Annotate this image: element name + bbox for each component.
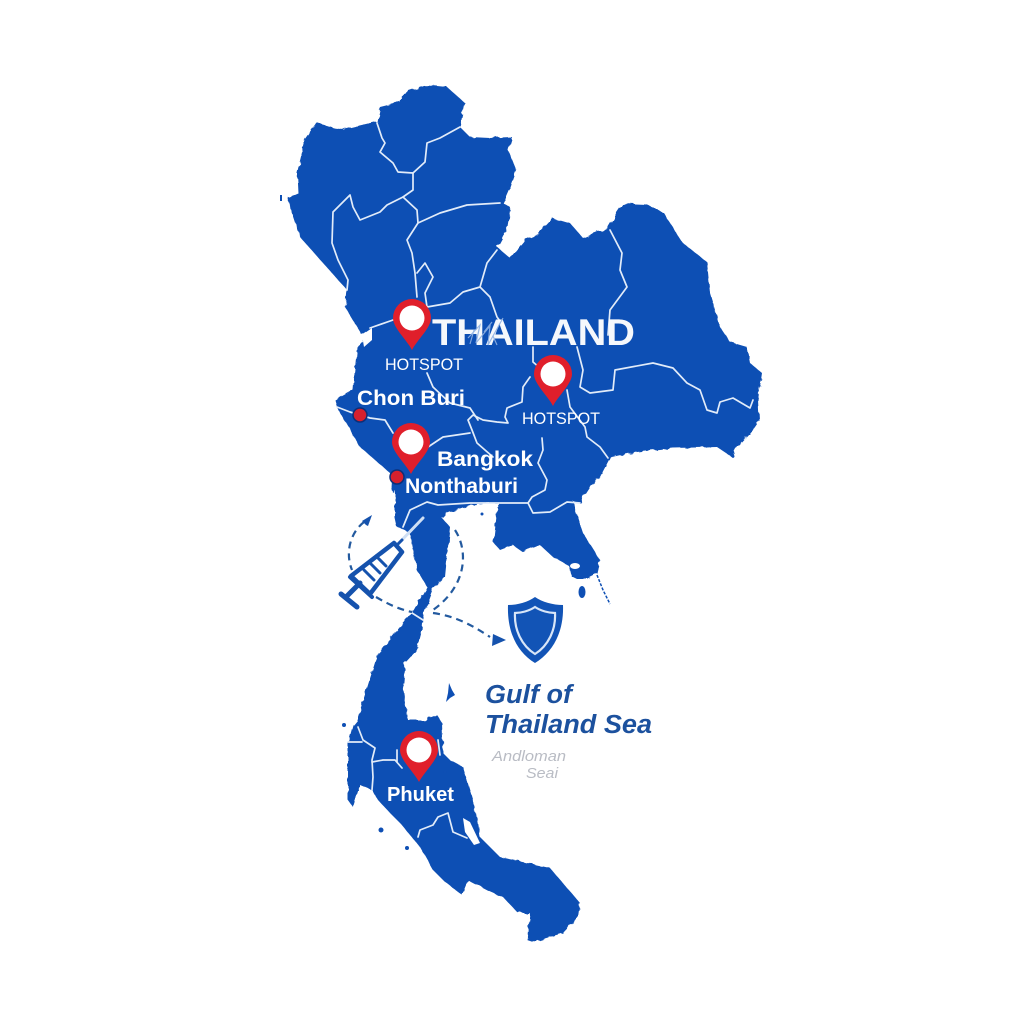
icon: shield bbox=[508, 597, 563, 663]
pin: north hotspot bbox=[393, 299, 431, 350]
label: Gulf of Thailand Sea: Thailand Sea bbox=[485, 711, 652, 739]
label: Gulf of Thailand Sea bbox=[485, 681, 652, 739]
pin: Phuket bbox=[400, 731, 438, 782]
label: Gulf of Thailand Sea: Gulf of bbox=[485, 681, 575, 709]
pin: Bangkok bbox=[392, 423, 430, 474]
arrow: dashed circuit from syringe to shield bbox=[349, 522, 490, 637]
label: Andloman Seai bbox=[491, 748, 566, 782]
label: Bangkok: Bangkok bbox=[437, 448, 533, 471]
marker: Nonthaburi bbox=[390, 470, 404, 484]
label: Andloman Seai: Andloman bbox=[491, 748, 566, 765]
label: hotspot east: HOTSPOT bbox=[522, 409, 600, 428]
map landmass bbox=[287, 85, 762, 942]
map of Thailand bbox=[280, 85, 762, 942]
label: hotspot north: HOTSPOT bbox=[385, 355, 463, 374]
province borders bbox=[332, 123, 753, 838]
islands bbox=[280, 195, 610, 850]
label: Phuket: Phuket bbox=[387, 784, 454, 806]
pin: east hotspot bbox=[534, 355, 572, 406]
label: Nonthaburi: Nonthaburi bbox=[405, 475, 518, 498]
title texture bbox=[468, 318, 503, 345]
inlet and bay cut-outs bbox=[362, 328, 580, 845]
label: Chon Buri: Chon Buri bbox=[357, 387, 465, 410]
arrowheads bbox=[362, 515, 506, 646]
label: Andloman Seai: Seai bbox=[526, 765, 559, 782]
title: THAILAND: THAILAND bbox=[432, 312, 635, 353]
marker: Chon Buri bbox=[353, 408, 367, 422]
icon: syringe bbox=[341, 518, 423, 607]
